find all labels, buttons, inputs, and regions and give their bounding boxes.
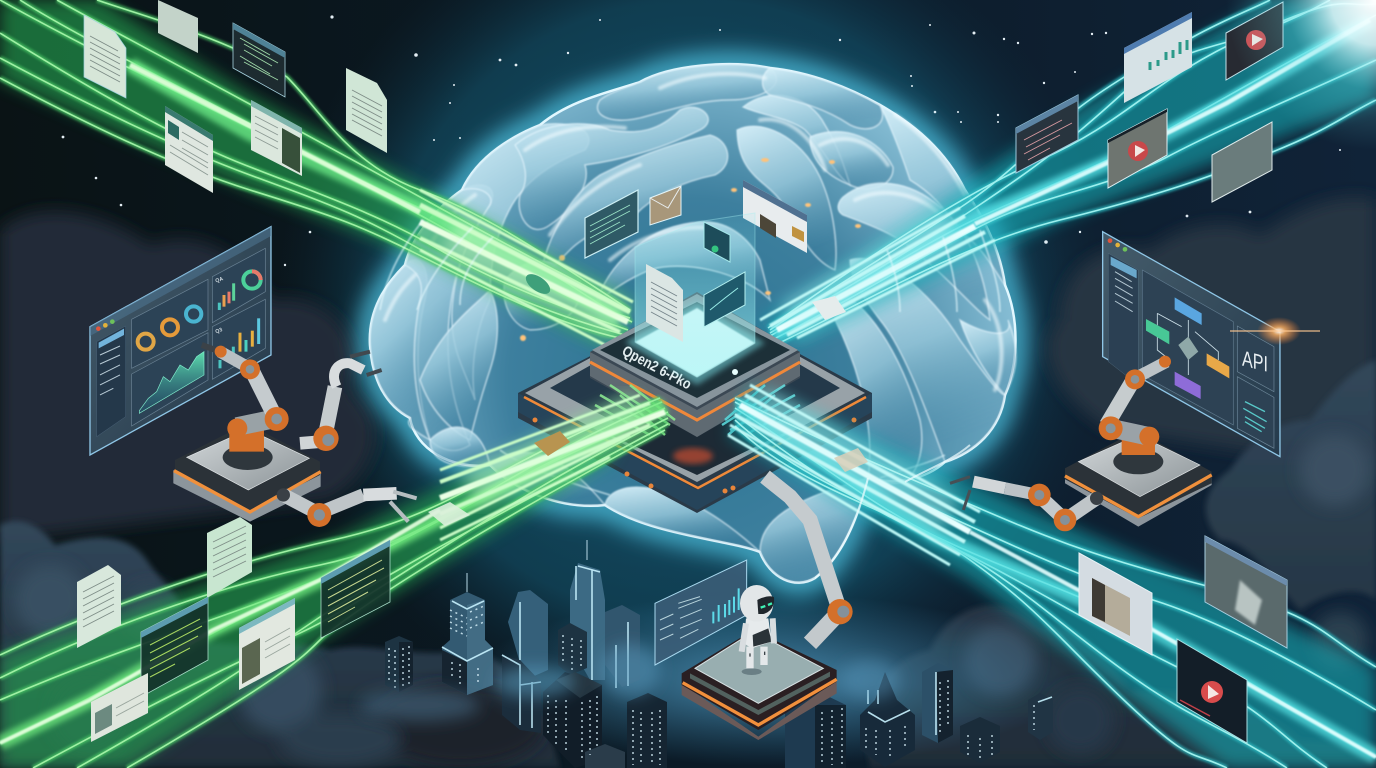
fog <box>360 644 900 721</box>
video window <box>1177 639 1247 743</box>
table card <box>251 100 302 176</box>
data stream: green lower-left <box>0 392 668 768</box>
right robot <box>950 356 1212 531</box>
brain body <box>370 64 1016 583</box>
status light <box>732 369 738 375</box>
city skyline <box>360 540 1053 768</box>
clouds: lower left <box>0 521 560 768</box>
brain lobes <box>370 64 1016 583</box>
code window <box>233 23 285 97</box>
web window <box>1079 553 1152 655</box>
robot arm to dashboard <box>195 428 299 452</box>
stripes to chip <box>728 385 980 565</box>
article card <box>91 673 148 742</box>
lower chip tier <box>518 300 872 513</box>
stars <box>62 15 1341 266</box>
tower edges <box>442 566 1052 735</box>
hologram column <box>635 213 755 377</box>
photo window <box>1205 536 1287 648</box>
document <box>77 565 121 648</box>
left dashboard: QA <box>215 276 224 285</box>
robot base <box>1065 473 1212 527</box>
spark points <box>520 158 861 341</box>
article card <box>239 598 295 690</box>
left robot <box>173 345 417 527</box>
dashboard window <box>1124 12 1192 103</box>
data stream: cyan lower-right <box>728 385 1376 768</box>
right dashboard: API <box>1242 346 1268 377</box>
gripper inside brain <box>523 270 553 298</box>
left dashboard <box>90 227 271 455</box>
towers right <box>785 663 1053 768</box>
document <box>346 68 387 153</box>
data stream: cyan, top-right <box>760 0 1376 345</box>
photo window <box>1212 122 1272 202</box>
textured page <box>158 0 198 53</box>
robot base <box>173 470 321 522</box>
code window <box>1016 95 1078 173</box>
video window <box>1226 2 1283 80</box>
bottom robot arm <box>765 477 853 643</box>
hologram chart card <box>704 272 745 327</box>
bottom panel behind robot <box>655 560 747 665</box>
documents: top-left <box>84 0 387 193</box>
left dashboard: Q3 <box>215 327 223 335</box>
lens flare: right dashboard <box>1230 317 1320 345</box>
cards inside brain <box>585 180 807 258</box>
robot arm lower <box>283 495 318 513</box>
brain contours over streams <box>380 220 1000 495</box>
robot arm to dashboard <box>1088 433 1188 455</box>
clouds: lower right <box>868 360 1376 768</box>
bottom platform <box>682 630 837 740</box>
city haze <box>470 594 1070 766</box>
document <box>207 517 252 598</box>
towers left <box>385 540 667 768</box>
brain lower rim over streams <box>815 445 970 578</box>
documents: lower-right <box>1079 536 1287 743</box>
clouds: upper right <box>1048 198 1376 470</box>
documents: top-right <box>1016 2 1283 202</box>
right dashboard <box>1103 232 1280 457</box>
data stream: green, top-left <box>0 0 633 348</box>
clouds: upper left <box>0 211 375 540</box>
chip connectors <box>595 385 800 435</box>
stripes to chip <box>440 395 665 540</box>
stripes through brain <box>420 190 633 345</box>
brain glow <box>370 64 1016 583</box>
stripes through brain <box>760 208 995 338</box>
robot arm lower <box>1065 498 1097 520</box>
article card <box>165 106 213 193</box>
robot arm to brain <box>325 387 335 437</box>
glowing screen <box>625 302 765 385</box>
upper chip tier <box>590 213 800 437</box>
code window <box>321 540 390 638</box>
top-right light flare <box>1226 0 1376 150</box>
documents: lower-left <box>77 517 390 742</box>
chip label: Qpen2 6-Pko <box>619 343 694 393</box>
document <box>84 15 126 98</box>
small robot <box>740 585 774 675</box>
window lights <box>389 606 1034 765</box>
video window <box>1108 109 1167 188</box>
brain highlights <box>385 74 1002 390</box>
hologram document <box>646 264 683 342</box>
small payload cards on streams <box>428 296 868 526</box>
brain <box>370 64 1016 583</box>
code window <box>141 597 208 697</box>
